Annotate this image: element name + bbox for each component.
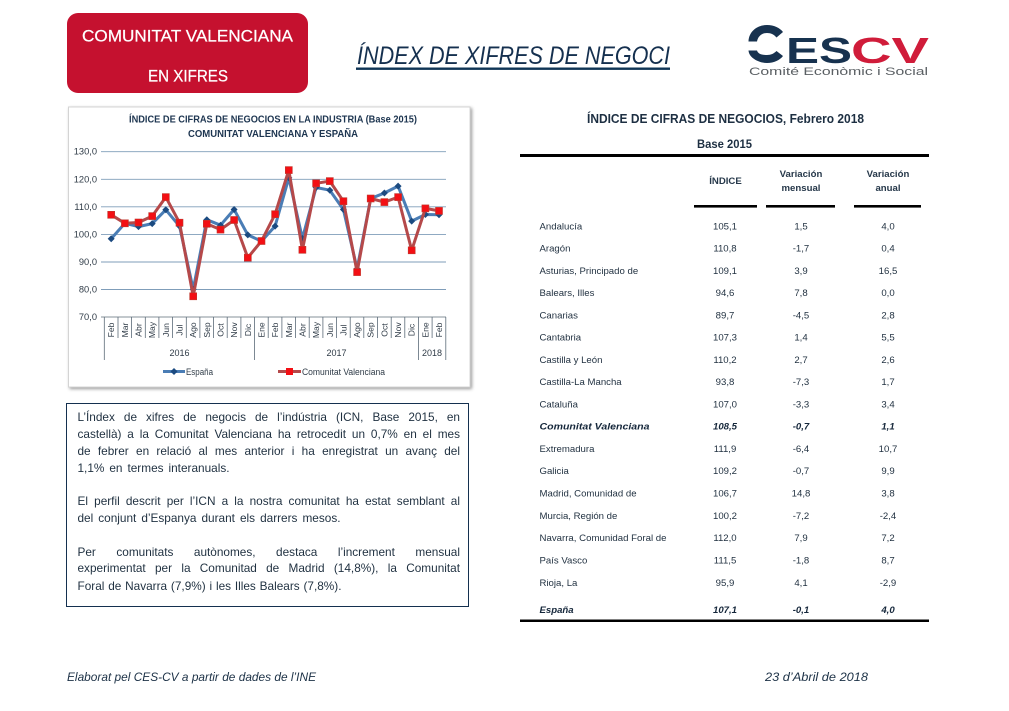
x axis month labels: Mar [284,322,294,337]
x axis month labels: Sep [202,322,212,338]
text block: commentary: El perfil descrit per l’ICN a la nostra comunitat ha estat semblant al [78,494,460,508]
text block: commentary: L’Índex de xifres de negocis de l’indústria (ICN, Base 2015, en [78,410,460,424]
table column headers: anual [875,183,901,194]
table rows: 7,9 [794,533,808,544]
table rows: Cataluña [540,399,579,410]
table rows: 95,9 [716,578,734,589]
table rows: País Vasco [540,556,587,566]
table rows: 8,7 [881,556,895,566]
table rows: Castilla y León [540,355,602,366]
table rows: 100,2 [713,511,737,522]
table rows: 2,7 [794,355,808,366]
table rows: Navarra, Comunidad Foral de [540,533,666,544]
x axis month labels: Feb [270,322,280,337]
text block: commentary: de febrer en relació al mes anterior i ha enregistrat un avanç del [78,444,460,458]
table rows: 7,2 [881,533,895,544]
table title: ÍNDICE DE CIFRAS DE NEGOCIOS, Febrero 2018 [587,111,864,126]
x axis month labels: Nov [229,322,239,338]
table rows: Galicia [540,466,569,477]
series: España [108,174,442,293]
table rows: 107,3 [713,333,737,344]
table rows: 14,8 [792,488,810,500]
table rows: 111,5 [714,556,736,566]
chart title: COMUNITAT VALENCIANA Y ESPAÑA [188,127,358,140]
y axis labels: 80,0 [79,284,97,294]
x axis month labels: Ene [256,322,266,338]
text block: commentary: experimentat per la Comunitad de Madrid (14,8%), la Comunitat [78,561,460,575]
table rows: 1,5 [794,222,808,232]
table rows: Balears, Illes [540,288,595,299]
table column headers [709,169,909,194]
table rows: 5,5 [881,333,895,344]
x axis month labels: Ago [352,322,362,338]
chart title: ÍNDICE DE CIFRAS DE NEGOCIOS EN LA INDUSTRIA (Base 2015) [129,112,417,126]
x axis year labels: 2017 [326,348,347,358]
table rows: -0,1 [793,605,809,616]
logo: CES CV [748,25,929,78]
panel: data table [520,111,929,622]
x axis month labels: Nov [393,322,403,338]
table rows: 1,4 [794,333,808,344]
table column headers: Variación [867,169,909,180]
text block: commentary: Per comunitats autònomes, destaca l’increment mensual [78,544,460,558]
table rows: 89,7 [716,310,734,321]
x axis month labels: Jul [338,324,348,336]
y axis labels [74,147,97,322]
table rows: Castilla-La Mancha [540,377,622,388]
x axis month labels: Ago [188,322,198,338]
table rows: 2,6 [881,355,895,366]
legend: España [163,367,213,377]
x axis month labels: Mar [120,322,130,337]
table rows: -7,2 [793,511,809,522]
table rows: 1,1 [881,422,895,432]
table rows: 105,1 [713,222,737,232]
table rows: 110,2 [713,355,737,366]
table rows: 16,5 [879,266,897,277]
badge: Comunitat Valenciana en xifres: EN XIFRES [148,66,228,86]
legend: Comunitat Valenciana: Comunitat Valenciana [302,367,385,377]
table rows: Cantabria [540,333,582,344]
table column headers: mensual [782,183,820,194]
x axis year labels: 2016 [169,348,190,358]
table rows: 3,8 [881,488,895,500]
table rows: 7,8 [794,288,808,299]
x axis month labels: Sep [366,322,376,338]
table rows: -0,7 [793,422,810,432]
text block: commentary: del conjunt d’Espanya durant els darrers mesos. [78,511,340,525]
x axis month labels: Abr [134,323,144,337]
table rows: -3,3 [793,399,809,410]
series: Comunitat Valenciana [108,167,442,300]
table rows: 4,0 [880,605,895,616]
table rows: 1,7 [881,377,895,388]
x axis month labels: May [311,321,321,338]
table rows: -0,7 [793,466,809,477]
x axis month labels: Oct [216,323,226,337]
x axis month labels: Jul [174,324,184,336]
table rows [540,222,897,616]
badge: Comunitat Valenciana en xifres [67,13,308,93]
footer: date: 23 d’Abril de 2018 [764,670,868,684]
x axis month labels: Feb [106,322,116,337]
logo: CES CV: Comité Econòmic i Social [749,66,928,78]
table rows: 108,5 [713,422,738,432]
badge: Comunitat Valenciana en xifres: COMUNITAT VALENCIANA [82,26,294,46]
table rows: Rioja, La [540,578,578,589]
table rows: Canarias [540,310,578,321]
logo: CES CV: ES [786,30,852,71]
table rows: 107,0 [713,399,737,410]
x axis month labels: Feb [434,322,444,337]
x axis year labels: 2018 [422,348,442,358]
table rows: 2,8 [881,310,895,321]
chart title [129,112,417,140]
text block: commentary: castellà) a la Comunitat Valenciana ha retrocedit un 0,7% en el mes [78,427,460,441]
table rows: 3,4 [881,399,895,410]
text block: commentary: Foral de Navarra (7,9%) i les Illes Balears (7,8%). [78,578,342,592]
x axis month labels: Abr [297,323,307,337]
x axis month labels: Jun [325,323,335,337]
x axis year labels [169,348,442,358]
table rows: Aragón [540,244,570,255]
table rows: España [540,605,574,616]
table rows: 9,9 [881,466,895,477]
table rows: 111,9 [714,444,736,455]
table column headers: ÍNDICE [709,175,742,187]
x axis month labels [106,321,444,338]
table column headers: Variación [780,169,822,180]
table rows: 93,8 [716,377,734,388]
table rows: 94,6 [716,288,734,299]
table rows: 109,2 [713,466,737,477]
table rows: 4,0 [881,222,895,232]
y axis labels: 90,0 [79,257,97,267]
table rows: -4,5 [793,310,809,321]
panel: line chart [68,107,470,387]
table rows: 0,4 [881,244,895,255]
x axis month labels: Jun [161,323,171,337]
table rows: Andalucía [540,222,583,232]
table rows: 110,8 [713,244,737,255]
table rows: 109,1 [713,266,737,277]
text block: commentary [66,403,469,607]
table rows: Madrid, Comunidad de [540,488,637,500]
text block: commentary: 1,1% en termes interanuals. [78,460,230,474]
y axis labels: 120,0 [74,174,97,184]
table rows: 112,0 [713,533,737,544]
table rows: Asturias, Principado de [540,266,638,277]
table rows: 4,1 [794,578,808,589]
table subtitle: Base 2015 [697,139,753,151]
table rows: Extremadura [540,444,595,455]
y axis labels: 110,0 [74,202,97,212]
x axis month labels: Oct [379,323,389,337]
footer: source: Elaborat pel CES-CV a partir de dades de l’INE [67,670,317,684]
y axis labels: 100,0 [74,229,97,239]
table rows: -2,9 [880,578,896,589]
legend: España: España [186,367,213,377]
table rows: Murcia, Región de [540,511,617,522]
table rows: 10,7 [879,444,897,455]
table rows: 0,0 [881,288,895,299]
y axis labels: 130,0 [74,147,97,157]
table rows: 107,1 [713,605,737,616]
title: ÍNDEX DE XIFRES DE NEGOCI [357,41,670,70]
table rows: 106,7 [713,488,737,500]
x axis month labels: May [147,321,157,338]
table rows: -7,3 [793,377,809,388]
y axis labels: 70,0 [79,312,97,322]
table rows: -1,8 [793,556,809,566]
table rows: Comunitat Valenciana [540,422,650,432]
table rows: -6,4 [793,444,810,455]
x axis month labels: Dic [243,323,253,336]
logo: CES CV: CV [851,30,929,71]
table rows: -2,4 [880,511,897,522]
x axis month labels: Dic [407,323,417,336]
table rows: -1,7 [793,244,809,255]
table rows: 3,9 [794,266,808,277]
x axis month labels: Ene [420,322,430,338]
